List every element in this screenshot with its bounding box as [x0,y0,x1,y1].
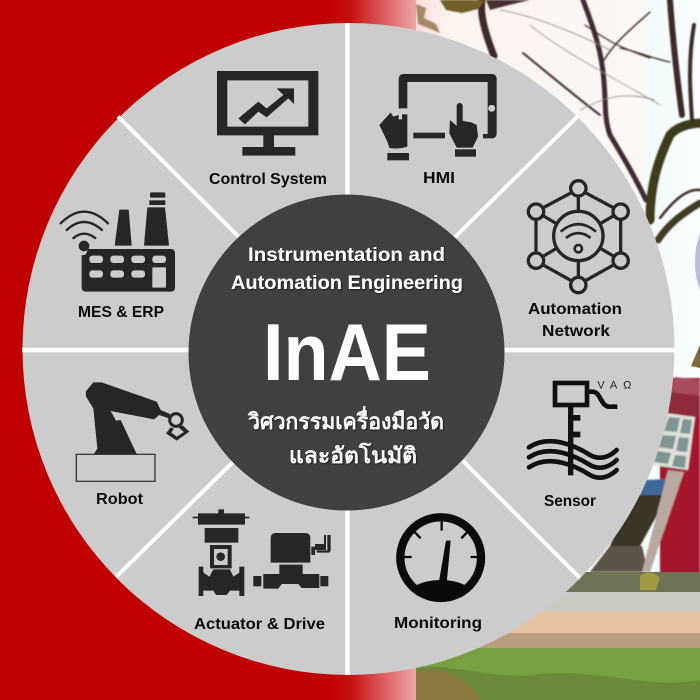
title: InAE: InAE [263,308,431,398]
lavender sign circle [695,212,700,312]
label: Automation Network: Automation [528,301,622,318]
campus photo background [416,0,700,700]
heading: programme name: Instrumentation and [248,244,445,266]
heading: programme name [231,244,463,294]
icon: robot arm [76,382,189,481]
icon: automation network [528,181,628,293]
icon: HMI tablet and hands [379,74,497,160]
icon: smart factory [60,192,175,292]
heading: Thai name: และอัตโนมัติ [289,442,417,468]
icon: control system monitor [217,71,318,156]
label: Robot: Robot [96,491,143,508]
label: Monitoring: Monitoring [394,615,482,632]
icon: monitoring gauge [400,517,481,601]
yellow foliage [416,0,530,33]
label: MES and ERP: MES & ERP [78,304,164,321]
label: Automation Network [528,301,622,340]
icon: sensor: VAΩ [597,380,631,392]
label: Automation Network: Network [542,323,610,340]
panel: centre hub [188,194,504,510]
label: Control System: Control System [209,171,327,188]
icon: sensor [529,380,631,478]
brown sign corner [691,345,700,368]
heading: programme name: Automation Engineering [231,272,463,294]
ground bands [560,572,700,592]
heading: Thai name: วิศวกรรมเครื่องมือวัด [247,405,444,434]
icon: actuator and drive [193,509,331,596]
heading: Thai name [247,405,444,468]
tree branches [482,0,700,240]
label: Sensor: Sensor [544,493,596,510]
label: Actuator and Drive: Actuator & Drive [194,616,325,633]
label: HMI: HMI [423,170,455,187]
building [590,377,700,578]
